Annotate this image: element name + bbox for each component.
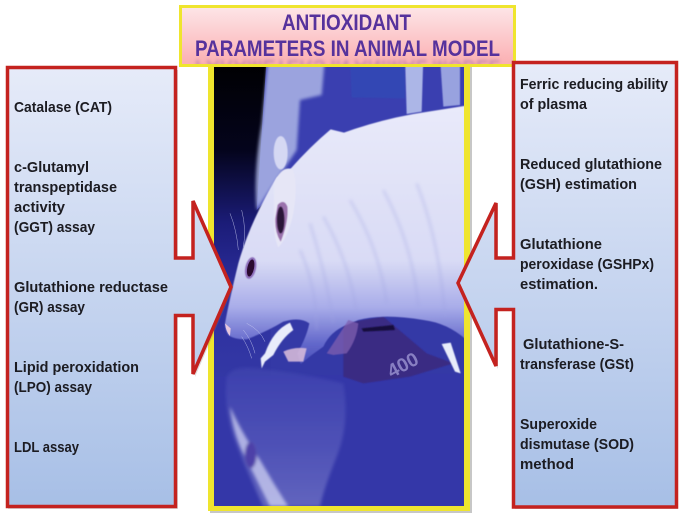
right list of assays: (GSH) estimation (520, 176, 637, 193)
right list of assays (520, 76, 669, 473)
right list of assays: transferase (GSt) (520, 356, 634, 373)
title text (195, 10, 500, 61)
left list of assays: Glutathione reductase (14, 279, 168, 296)
rat far ear (274, 136, 288, 169)
right list of assays: method (520, 456, 574, 473)
right callout panel (458, 62, 678, 509)
rat front paw (261, 323, 293, 368)
left list of assays: (LPO) assay (14, 379, 93, 396)
photo panel: white rat on blue background (208, 57, 472, 513)
right callout arrow shape (458, 62, 676, 507)
right list of assays: of plasma (520, 96, 588, 113)
title text: PARAMETERS IN ANIMAL MODEL (195, 36, 500, 61)
left list of assays: transpeptidase (14, 179, 117, 196)
left list of assays: LDL assay (14, 439, 80, 456)
left list of assays: (GR) assay (14, 299, 86, 316)
rat eye (244, 256, 257, 280)
rat near ear (274, 168, 292, 246)
title text: ANTIOXIDANT (282, 10, 411, 35)
right list of assays: Superoxide (520, 416, 597, 433)
left list of assays: c-Glutamyl (14, 159, 89, 176)
right list of assays: estimation. (520, 276, 598, 293)
left list of assays: Catalase (CAT) (14, 99, 112, 116)
left callout panel (8, 68, 233, 509)
left list of assays (14, 99, 168, 456)
left callout arrow shape (8, 68, 231, 506)
right list of assays: dismutase (SOD) (520, 436, 634, 453)
table shadow and banknote (343, 317, 461, 383)
rat body (225, 105, 470, 364)
left list of assays: (GGT) assay (14, 219, 96, 236)
title banner (179, 5, 516, 67)
whiskers (230, 210, 265, 358)
left list of assays: activity (14, 199, 66, 216)
title reflection: PARAMETERS IN ANIMAL MODEL (195, 55, 500, 80)
fur shading (300, 184, 440, 276)
right list of assays: peroxidase (GSHPx) (520, 256, 654, 273)
right list of assays: Ferric reducing ability (520, 76, 669, 93)
right list of assays: Glutathione-S- (523, 336, 624, 353)
rat reflection (226, 368, 346, 507)
left list of assays: Lipid peroxidation (14, 359, 139, 376)
right list of assays: Reduced glutathione (520, 156, 662, 173)
right list of assays: Glutathione (520, 236, 602, 253)
table shadow and banknote: 400 (384, 349, 422, 383)
